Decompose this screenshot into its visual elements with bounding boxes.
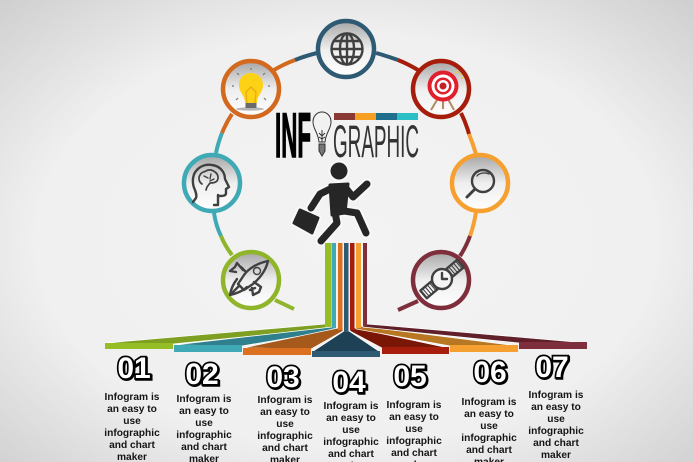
- ribbon 01: green: [105, 243, 331, 349]
- number 07: 07: [535, 351, 569, 384]
- description 06: use: [480, 421, 498, 432]
- description 05: use: [405, 424, 423, 435]
- ring connectors: [214, 53, 476, 310]
- number 04: 04: [332, 366, 366, 399]
- description 05: Infogram is: [387, 400, 442, 411]
- description 03: use: [276, 419, 294, 430]
- icon: light bulb: [223, 61, 279, 117]
- icon: target: [413, 61, 469, 117]
- title: infographic logo: INF: [275, 101, 311, 171]
- ribbon 05: red: [350, 243, 449, 354]
- infographic canvas: GRAPHIC: [333, 116, 419, 167]
- number 02: 02: [185, 358, 219, 391]
- description 06: and chart: [466, 445, 513, 456]
- description 07: use: [547, 414, 565, 425]
- description 06: Infogram is: [462, 397, 517, 408]
- description 07: and chart: [533, 438, 580, 449]
- description 03: and chart: [262, 443, 309, 454]
- title bulb glyph: [313, 112, 331, 156]
- description 04: Infogram is: [324, 401, 379, 412]
- description 05: an easy to: [389, 412, 439, 423]
- item 02: [176, 358, 232, 462]
- description 02: use: [195, 418, 213, 429]
- title colour bar: [334, 113, 418, 120]
- description 06: infographic: [461, 433, 517, 444]
- description 02: infographic: [176, 430, 232, 441]
- icon: wristwatch: [413, 252, 469, 308]
- description 03: infographic: [257, 431, 313, 442]
- item 06: [461, 356, 517, 462]
- description 01: infographic: [104, 428, 160, 439]
- item 03: [257, 361, 313, 462]
- description 01: and chart: [109, 440, 156, 451]
- description 02: and chart: [181, 442, 228, 453]
- item 07: [528, 351, 584, 461]
- number 01: 01: [117, 352, 151, 385]
- description 03: Infogram is: [258, 395, 313, 406]
- description 05: and chart: [391, 448, 438, 459]
- ribbon 04: navy: [312, 243, 380, 357]
- icon: globe: [318, 21, 374, 77]
- icon: brain head: [184, 155, 240, 211]
- description 07: an easy to: [531, 402, 581, 413]
- description 02: Infogram is: [177, 394, 232, 405]
- description 07: Infogram is: [529, 390, 584, 401]
- description 06: an easy to: [464, 409, 514, 420]
- item 04: [323, 366, 379, 462]
- icon: rocket: [223, 252, 279, 308]
- description 04: and chart: [328, 449, 375, 460]
- number 06: 06: [473, 356, 507, 389]
- description 04: use: [342, 425, 360, 436]
- description 02: an easy to: [179, 406, 229, 417]
- ribbon 02: teal: [174, 243, 336, 352]
- description 07: infographic: [528, 426, 584, 437]
- ribbon 07: maroon: [363, 243, 587, 349]
- number 05: 05: [393, 360, 427, 393]
- item 01: [104, 352, 160, 462]
- description 07: maker: [541, 450, 571, 461]
- ribbon 06: amber: [356, 243, 518, 352]
- description 04: an easy to: [326, 413, 376, 424]
- description 05: infographic: [386, 436, 442, 447]
- description 01: an easy to: [107, 404, 157, 415]
- description 03: an easy to: [260, 407, 310, 418]
- description 04: infographic: [323, 437, 379, 448]
- ribbon 03: orange: [243, 243, 343, 355]
- icon: running businessman: [294, 160, 367, 241]
- icon: magnifier: [452, 155, 508, 211]
- number 03: 03: [266, 361, 300, 394]
- item 05: [386, 360, 442, 462]
- description 01: use: [123, 416, 141, 427]
- description 01: Infogram is: [105, 392, 160, 403]
